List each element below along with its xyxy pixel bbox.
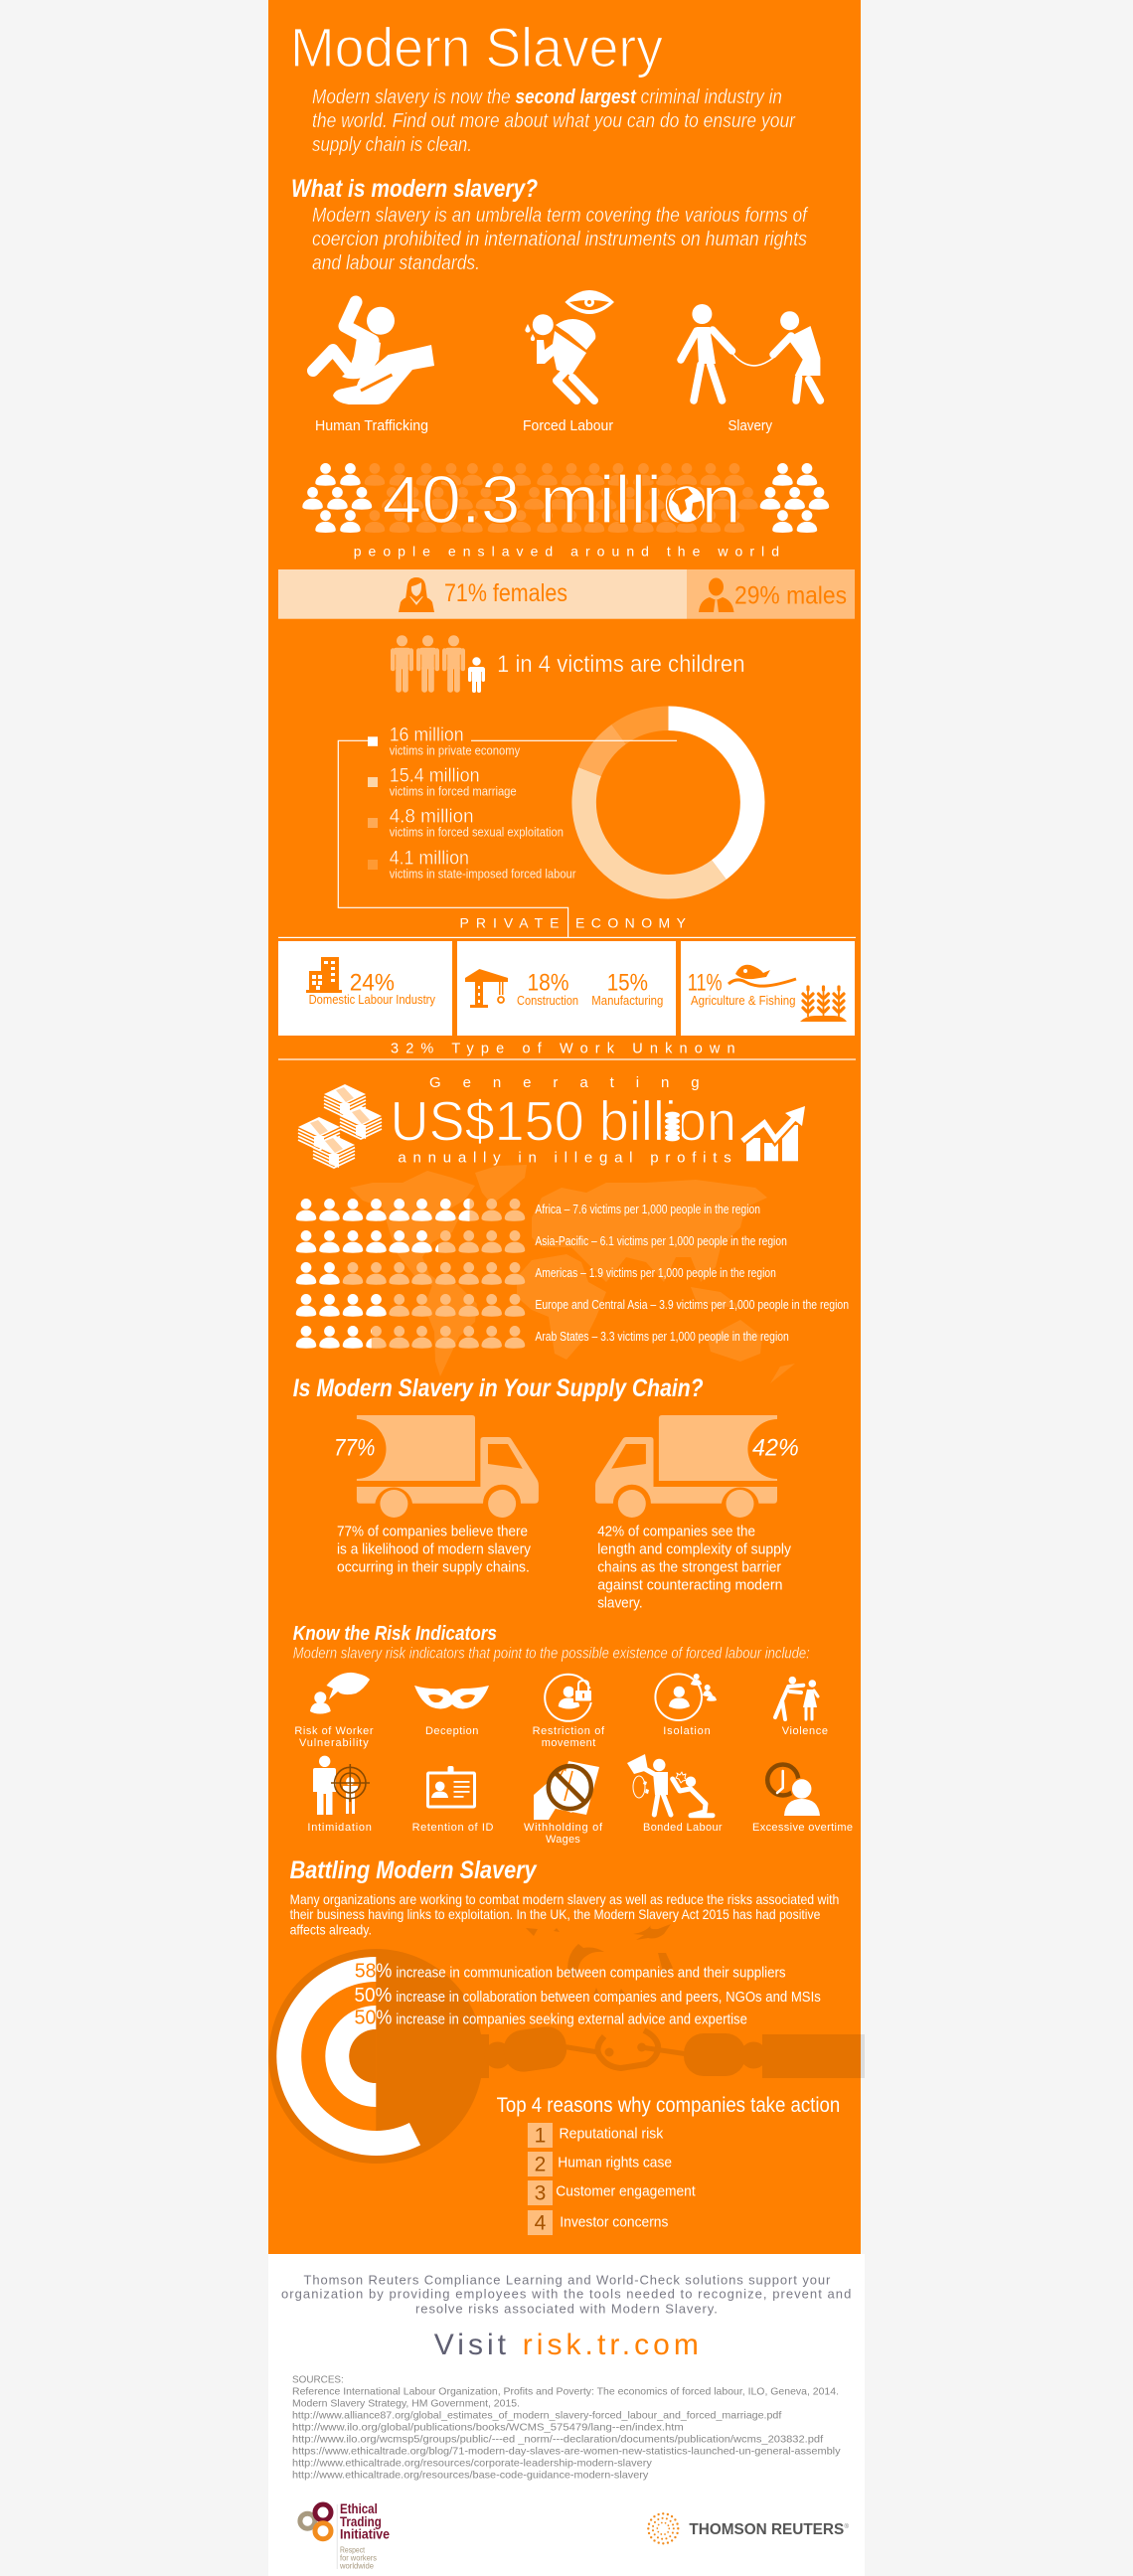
reason 1: Reputational risk [559, 2126, 664, 2143]
intro paragraph: Many organizations are working to combat modern slavery as well as reduce the risks associated with [290, 1891, 839, 1907]
pictogram: Americas row: Americas – 1.9 victims per 1,000 people in the region [535, 1266, 776, 1280]
pictogram: Arab States row [296, 1326, 789, 1349]
icon: left people cluster [302, 463, 372, 533]
reason 4: 4 [535, 2212, 547, 2234]
intro text: the world. Find out more about what you can do to ensure your [312, 110, 796, 132]
icon: violence [775, 1677, 818, 1719]
reason 1 [528, 2123, 664, 2148]
faint crowd background [365, 463, 758, 533]
risk labels row two: Retention of ID [412, 1822, 494, 1834]
text: sources: http://www.ethicaltrade.org/resources/corporate-leadership-modern-slavery [292, 2457, 653, 2469]
icon labels: Slavery [728, 417, 772, 434]
risk labels row one: Isolation [663, 1725, 711, 1737]
label: 29% males: 29% males [734, 581, 847, 609]
risk labels row one: Violence [782, 1725, 828, 1737]
text: 77% caption: is a likelihood of modern slavery [337, 1541, 531, 1558]
card: agriculture and fishing: Agriculture & Fishing [691, 993, 795, 1008]
stat: 58 percent: 58 [355, 1959, 376, 1982]
text: 42% caption: 42% of companies see the [597, 1524, 755, 1540]
text: sources: Modern Slavery Strategy, HM Government, 2015. [292, 2397, 520, 2409]
intro text: Modern slavery is now the second largest criminal industry in [312, 86, 782, 108]
reason 3 [528, 2180, 696, 2205]
male segment [687, 569, 855, 619]
panel: header [290, 16, 809, 274]
legend: forced sexual exploitation: victims in forced sexual exploitation [390, 826, 564, 840]
heading: private economy: ECONOMY [575, 914, 687, 930]
icon: bonded labour [627, 1754, 713, 1816]
icon: truck 42 percent [595, 1415, 807, 1518]
legend: private economy [368, 725, 521, 758]
risk labels row two: Intimidation [307, 1822, 372, 1834]
legend: state-imposed forced labour: 4.1 million [390, 848, 469, 869]
connector bracket [338, 740, 677, 937]
stat: 50 percent collaboration [354, 1984, 821, 2007]
text: call to action paragraph: organization by providing employees with the tools needed to recognize, prevent and [281, 2286, 851, 2301]
legend: private economy: 16 million [390, 725, 464, 746]
reason 4 [528, 2210, 668, 2235]
text: sources [292, 2373, 841, 2481]
stat: 50 percent collaboration: increase in collaboration between companies and peers, NGOs and MSIs [396, 1989, 821, 2006]
label: 71% females: 71% females [444, 579, 567, 607]
pictogram: Asia-Pacific row [296, 1230, 787, 1253]
icon: wheat [800, 987, 847, 1022]
logo: Ethical Trading Initiative: Initiative [340, 2527, 390, 2542]
logo: Ethical Trading Initiative: Respect [340, 2546, 366, 2555]
pictogram: Arab States row: Arab States – 3.3 victims per 1,000 people in the region [535, 1330, 789, 1344]
logo: Ethical Trading Initiative: Trading [340, 2514, 382, 2529]
reason 1: 1 [535, 2125, 546, 2147]
reason 2: 2 [535, 2153, 546, 2176]
icon: human trafficking [313, 302, 434, 404]
risk labels row one: Restriction of [533, 1725, 605, 1737]
panel: 40.3 million statistic [302, 462, 829, 559]
intro text [312, 86, 796, 156]
heading: supply chain question: Is Modern Slavery in Your Supply Chain? [293, 1374, 704, 1402]
text: 42% caption [597, 1524, 791, 1612]
title: Modern Slavery [290, 16, 663, 79]
legend: state-imposed forced labour [368, 848, 576, 882]
pictogram: Europe and Central Asia row [296, 1294, 849, 1317]
icon: birds background [526, 1924, 673, 1996]
icon: man [699, 578, 733, 612]
stat: 58 percent: % [376, 1959, 392, 1982]
intro paragraph: affects already. [290, 1922, 372, 1938]
pictogram: Asia-Pacific row: Asia-Pacific – 6.1 victims per 1,000 people in the region [535, 1234, 787, 1248]
definition text: Modern slavery is an umbrella term covering the various forms of [312, 205, 809, 227]
stat: 50 percent external advice: % [376, 2007, 392, 2029]
stat: 58 percent [355, 1959, 786, 1982]
value: 77%: 77% [334, 1434, 375, 1461]
text: 42% caption: length and complexity of supply [597, 1541, 791, 1558]
female segment [278, 569, 687, 619]
legend: forced marriage [368, 765, 517, 799]
text: visit link: Visit [434, 2329, 507, 2361]
card: domestic labour: 24% [350, 970, 395, 997]
stat: 50 percent collaboration: 50% [354, 1984, 392, 2007]
legend: private economy: victims in private economy [390, 744, 521, 758]
icon: intimidation [313, 1756, 370, 1815]
text: visit link [434, 2329, 699, 2361]
logo: Ethical Trading Initiative [300, 2501, 390, 2571]
logo: Thomson Reuters: THOMSON REUTERS [689, 2521, 844, 2538]
icon labels [315, 417, 772, 434]
logo: Thomson Reuters: ® [845, 2523, 849, 2530]
risk labels row one [294, 1725, 828, 1749]
card: construction and manufacturing: 18% [527, 970, 568, 997]
panel: victims breakdown donut [338, 706, 764, 937]
value: 42%: 42% [752, 1434, 799, 1461]
reason 3: 3 [535, 2182, 546, 2204]
reason 2: Human rights case [558, 2155, 672, 2172]
panel: gender split bar [278, 569, 855, 619]
big number: 40.3 million [382, 462, 741, 538]
icon: truck 77 percent [326, 1415, 539, 1518]
risk labels row one: Risk of Worker [294, 1725, 374, 1737]
risk labels row one: Deception [425, 1725, 478, 1737]
text: sources: http://www.ethicaltrade.org/resources/base-code-guidance-modern-slavery [292, 2469, 649, 2481]
card: construction and manufacturing: Construction [517, 993, 578, 1008]
panel: supply chain [293, 1374, 807, 1612]
text: sources: http://www.ilo.org/global/publications/books/WCMS_575479/lang--en/index.htm [292, 2421, 684, 2433]
icon labels: Human Trafficking [315, 417, 428, 434]
icon: withholding of wages [534, 1761, 599, 1820]
icon: restriction of movement [545, 1675, 593, 1721]
icon: slavery, one person leading another [681, 304, 820, 401]
subtitle: people enslaved around the world [354, 543, 779, 559]
orange panel background [268, 0, 861, 2254]
pictogram: Africa row: Africa – 7.6 victims per 1,000 people in the region [535, 1203, 760, 1216]
text: 77% caption: occurring in their supply chains. [337, 1559, 530, 1576]
legend: forced marriage: 15.4 million [390, 765, 480, 786]
icon: broken chain [467, 2024, 865, 2078]
text: call to action paragraph: Thomson Reuters Compliance Learning and World-Check solutions support your [304, 2272, 831, 2287]
risk labels row two: Wages [546, 1834, 580, 1846]
text: call to action paragraph [281, 2272, 851, 2316]
panel: footer [281, 2272, 851, 2571]
text: 77% caption: 77% of companies believe there [337, 1524, 528, 1540]
stat: 58 percent: increase in communication between companies and their suppliers [396, 1964, 786, 1981]
top rule [278, 937, 856, 938]
text: sources: http://www.alliance87.org/global_estimates_of_modern_slavery-forced_labour_and_forced_marriage.pdf [292, 2409, 781, 2421]
text: 42% caption: against counteracting modern [597, 1577, 783, 1594]
intro paragraph: their business having links to exploitation. In the UK, the Modern Slavery Act 2015 has had positive [290, 1906, 821, 1922]
panel: private economy [278, 914, 856, 1060]
icon: globe [667, 484, 707, 524]
icon: woman [399, 577, 434, 612]
icon labels: Forced Labour [523, 417, 613, 434]
icon: retention of ID [427, 1766, 475, 1807]
icon: mask [414, 1686, 489, 1708]
icon: forced labour [525, 290, 614, 401]
card: construction and manufacturing [457, 941, 676, 1036]
definition text: coercion prohibited in international instruments on human rights [312, 229, 807, 250]
panel: risk indicators [293, 1623, 853, 1846]
card: agriculture and fishing: 11% [688, 970, 723, 997]
panel: battling modern slavery [268, 1856, 865, 2235]
heading: top 4 reasons: Top 4 reasons why companies take action [497, 2094, 840, 2117]
card: construction and manufacturing: Manufacturing [591, 993, 663, 1008]
icon: excessive overtime [767, 1765, 820, 1816]
risk labels row one: Vulnerability [299, 1737, 369, 1749]
icon: isolation [655, 1674, 717, 1720]
logo: Ethical Trading Initiative: for workers [340, 2554, 377, 2563]
card: construction and manufacturing: 15% [607, 970, 648, 997]
heading: what is modern slavery: What is modern slavery? [291, 175, 538, 203]
icon: child [468, 657, 485, 693]
card: agriculture and fishing [681, 941, 855, 1036]
icon: coin stack [662, 1105, 682, 1142]
card: domestic labour: Domestic Labour Industry [309, 992, 435, 1007]
risk labels row one: movement [542, 1737, 595, 1749]
chart: concentric progress rings [268, 1949, 483, 2164]
text: 77% caption [337, 1524, 531, 1576]
reason 4: Investor concerns [560, 2214, 668, 2231]
heading: know the risk indicators: Know the Risk Indicators [293, 1623, 497, 1645]
icon: money stacks [298, 1084, 382, 1168]
text: 42% caption: slavery. [597, 1595, 643, 1612]
heading: generating: Generating [429, 1074, 700, 1091]
panel: illegal profits [296, 1074, 849, 1383]
logo: Ethical Trading Initiative: Ethical [340, 2501, 378, 2516]
risk labels row two: Excessive overtime [752, 1822, 853, 1834]
definition text [312, 205, 809, 274]
text: call to action paragraph: resolve risks associated with Modern Slavery. [415, 2301, 718, 2316]
subtitle: annually in illegal profits: annually in illegal profits [398, 1149, 731, 1166]
icon: buildings [306, 957, 342, 993]
legend: forced sexual exploitation: 4.8 million [390, 806, 474, 827]
legend: forced sexual exploitation [368, 806, 564, 840]
intro paragraph [290, 1891, 839, 1938]
text: 1 in 4 victims are children: 1 in 4 victims are children [497, 651, 745, 678]
card: domestic labour [278, 941, 452, 1036]
heading: private economy [459, 914, 687, 930]
icon: three adults [391, 635, 465, 693]
panel: children [391, 635, 745, 693]
panel: three forms of slavery [313, 290, 820, 434]
logo: Thomson Reuters [648, 2513, 849, 2543]
text: 42% caption: chains as the strongest barrier [597, 1559, 781, 1576]
icon: fish [728, 965, 796, 986]
text: sources: https://www.ethicaltrade.org/blog/71-modern-day-slaves-are-women-new-statistics-launched-un-general-assembly [292, 2445, 841, 2457]
logo: Ethical Trading Initiative: worldwide [339, 2562, 375, 2571]
stat: 50 percent external advice: increase in companies seeking external advice and expertise [396, 2012, 747, 2028]
bottom rule [278, 1058, 856, 1060]
icon: rising chart [742, 1106, 805, 1161]
pictogram: Africa row [296, 1199, 760, 1221]
text: sources: SOURCES: [292, 2373, 344, 2385]
risk labels row two: Bonded Labour [643, 1822, 723, 1834]
risk labels row two: Withholding of [524, 1822, 603, 1834]
icon: worker vulnerability [310, 1673, 370, 1713]
text: sources: Reference International Labour Organization, Profits and Poverty: The economics of forced labour, ILO, Geneva, 2014. [292, 2385, 839, 2397]
legend: forced marriage: victims in forced marriage [390, 785, 517, 799]
world map background [350, 1165, 795, 1383]
text: sources: http://www.ilo.org/wcmsp5/groups/public/---ed _norm/---declaration/documents/publication/wcms_203832.pdf [292, 2433, 823, 2445]
legend: state-imposed forced labour: victims in state-imposed forced labour [390, 868, 576, 882]
icon: crane [465, 969, 508, 1008]
intro text: supply chain is clean. [312, 134, 472, 156]
reason 2 [528, 2152, 672, 2176]
text: 32% type of work unknown: 32% Type of Work Unknown [391, 1041, 735, 1056]
icon: right people cluster [760, 463, 829, 533]
heading: private economy: PRIVATE [459, 914, 559, 930]
risk labels row two [307, 1822, 853, 1846]
big figure: US$150 billion [390, 1090, 736, 1154]
stat: 50 percent external advice: 50 [354, 2007, 376, 2029]
stat: 50 percent external advice [354, 2007, 747, 2029]
subheading: Modern slavery risk indicators that point to the possible existence of forced labour include: [293, 1646, 810, 1663]
text: visit link: risk.tr.com [523, 2329, 699, 2361]
white footer background [268, 2254, 865, 2576]
donut chart [571, 706, 764, 899]
pictogram: Americas row [296, 1262, 776, 1285]
heading: battling modern slavery: Battling Modern Slavery [290, 1856, 538, 1884]
reason 3: Customer engagement [556, 2183, 696, 2200]
definition text: and labour standards. [312, 252, 480, 274]
pictogram: Europe and Central Asia row: Europe and Central Asia – 3.9 victims per 1,000 people in the region [535, 1298, 849, 1312]
